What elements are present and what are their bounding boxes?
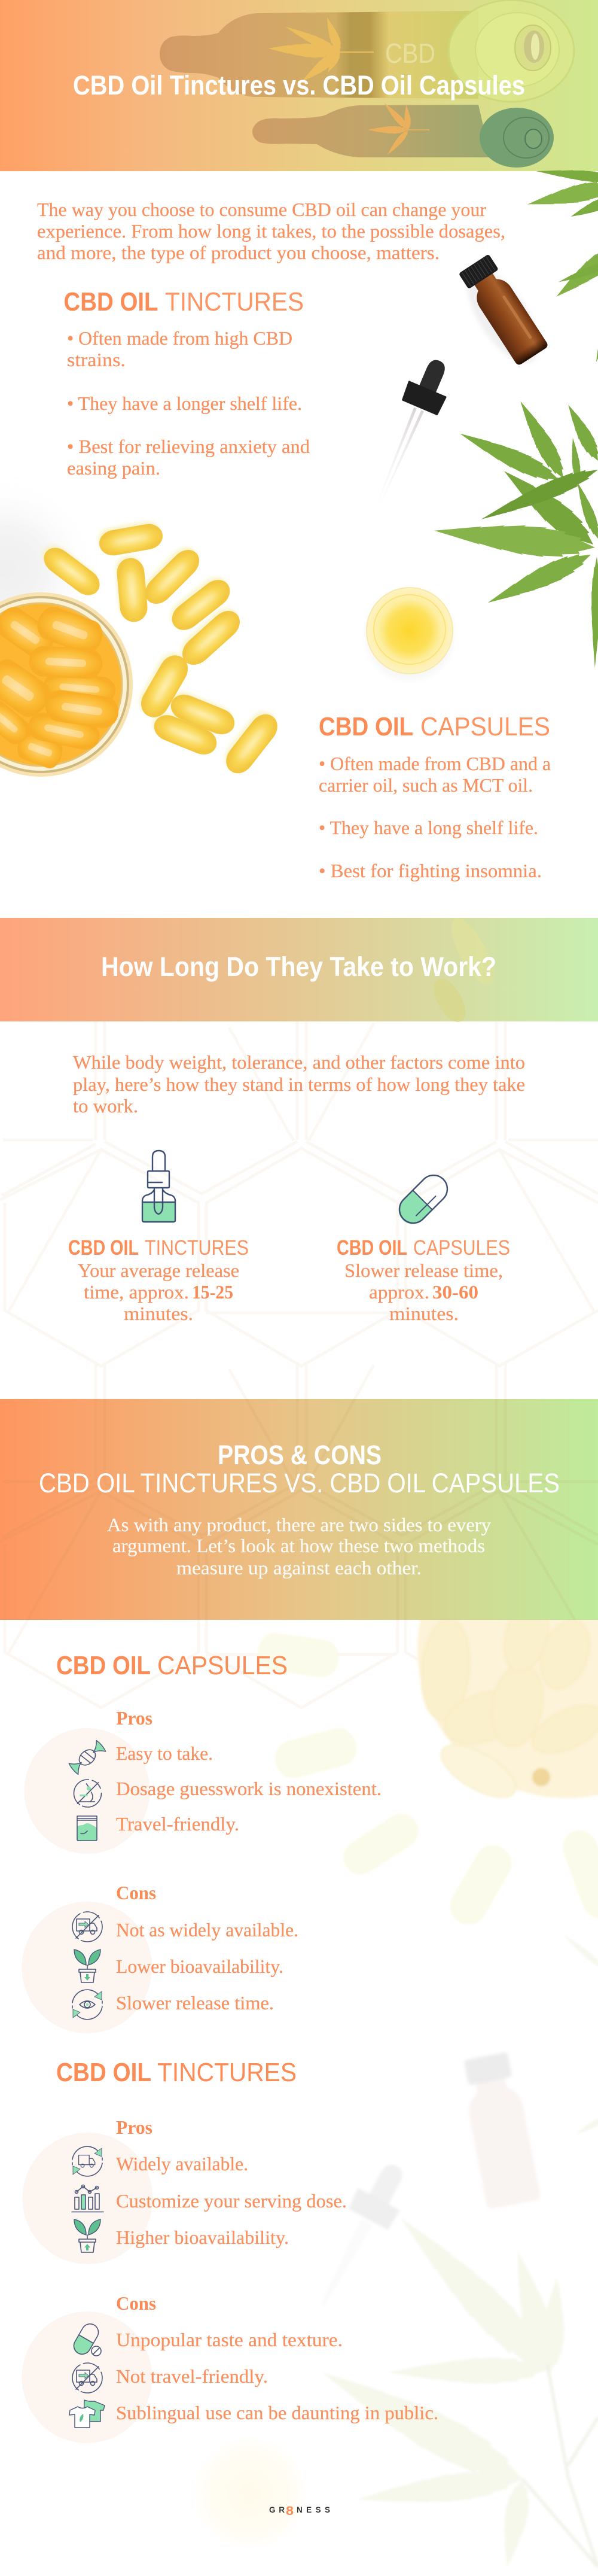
text: intro paragraph: and more, the type of product you choose, matters. <box>37 242 440 263</box>
label: Pros <box>116 2116 152 2138</box>
text: Sublingual use can be daunting in public. <box>116 2402 438 2423</box>
text: 15-25 <box>192 1281 233 1303</box>
label: Cons <box>116 2292 156 2314</box>
text: intro paragraph: The way you choose to consume CBD oil can change your <box>37 199 486 220</box>
icon: plant with up arrow <box>74 2219 100 2252</box>
background: pattern on band <box>0 1363 598 1708</box>
heading: CBD OIL <box>68 1236 139 1260</box>
text: Slower release time. <box>116 1992 274 2014</box>
text: Easy to take. <box>116 1742 213 1764</box>
text: Slower release time, <box>344 1260 503 1281</box>
image: faded loose capsules <box>257 1632 598 1930</box>
heading: tinctures: CBD OIL <box>56 2058 151 2087</box>
image: bottom bottle <box>252 101 554 168</box>
text: tinctures bullets: • Best for relieving anxiety and <box>67 436 310 457</box>
logo: GR8NESS <box>269 2504 330 2518</box>
background: hexagon pattern <box>0 1021 598 1708</box>
heading: How Long Do They Take to Work? <box>101 951 496 982</box>
text: capsules bullets <box>319 753 551 881</box>
text: capsules bullets: • Often made from CBD and a <box>319 753 551 774</box>
text: tinctures bullets: • Often made from high CBD <box>67 327 292 349</box>
image: top bottle <box>160 0 574 102</box>
heading: CAPSULES <box>413 1236 510 1260</box>
text: intro paragraph: experience. From how long it takes, to the possible dosages, <box>37 220 505 242</box>
label: Pros <box>116 1707 152 1729</box>
icon: eye cycle <box>72 1990 102 2020</box>
icon: candy <box>68 1740 106 1775</box>
image: capsules and jar <box>0 515 283 779</box>
icon: capsule with no sign <box>71 2321 102 2358</box>
title: CBD Oil Tinctures vs. CBD Oil Capsules <box>73 70 525 101</box>
group: capsules cons <box>22 1882 298 2033</box>
image: dropper <box>353 353 457 528</box>
panel: pros and cons band <box>0 1363 598 1708</box>
text: Dosage guesswork is nonexistent. <box>116 1778 382 1799</box>
icon: no delivery <box>72 2363 102 2393</box>
text: how long intro: While body weight, tolerance, and other factors come into <box>73 1051 525 1073</box>
icon: no delivery <box>72 1912 102 1942</box>
image: faded oil jar <box>193 2436 307 2551</box>
text: Higher bioavailability. <box>116 2227 289 2248</box>
text: Not travel-friendly. <box>116 2365 268 2387</box>
icon: shirts <box>69 2400 105 2428</box>
logo: GR8NESS: 8 <box>286 2504 294 2518</box>
icon: travel bag <box>77 1816 97 1841</box>
group: capsules pros <box>24 1707 382 1854</box>
heading <box>337 1236 510 1260</box>
image: faded leaves right edge <box>561 1932 598 2137</box>
band: how long heading <box>0 913 598 1027</box>
icon: plant with down arrow <box>74 1950 100 1982</box>
text: intro: As with any product, there are two sides to every <box>107 1514 491 1535</box>
text: 30-60 <box>432 1281 478 1303</box>
panel: header band <box>0 0 598 171</box>
column: tinctures release time <box>68 1151 249 1324</box>
text: Widely available. <box>116 2153 248 2174</box>
text: tinctures bullets: • They have a longer shelf life. <box>67 393 302 414</box>
heading: CBD oil capsules <box>319 712 550 741</box>
icon: bar chart <box>72 2185 103 2212</box>
group: tinctures pros <box>23 2116 347 2264</box>
text: tinctures bullets: easing pain. <box>67 457 160 479</box>
heading: CBD oil capsules: CAPSULES <box>420 712 550 741</box>
text: minutes. <box>389 1303 459 1324</box>
text <box>78 1260 239 1324</box>
text: intro: argument. Let’s look at how these two methods <box>112 1535 485 1556</box>
heading: CBD oil capsules: CBD OIL <box>319 712 413 741</box>
heading: CBD oil tinctures: CBD OIL <box>63 287 158 317</box>
text: intro <box>107 1514 491 1579</box>
logo: GR8NESS: NESS <box>297 2505 330 2514</box>
text: how long intro: to work. <box>73 1095 138 1117</box>
text: intro paragraph <box>37 199 505 263</box>
heading: tinctures: TINCTURES <box>157 2058 297 2087</box>
icon: dropper bottle <box>142 1151 175 1222</box>
heading: capsules <box>56 1651 288 1680</box>
heading: capsules: CAPSULES <box>157 1651 288 1680</box>
heading <box>68 1236 249 1260</box>
image: faded capsule bowl <box>417 1499 598 1808</box>
text: Customize your serving dose. <box>116 2190 347 2212</box>
heading: CBD OIL <box>337 1236 407 1260</box>
text: Lower bioavailability. <box>116 1955 283 1977</box>
text: capsules bullets: carrier oil, such as MCT oil. <box>319 774 533 796</box>
heading: pros and cons: PROS & CONS <box>218 1440 382 1470</box>
text: capsules bullets: • They have a long shelf life. <box>319 817 538 838</box>
text: CBD label on bottle: CBD <box>385 38 435 69</box>
panel: how long section <box>0 913 598 1708</box>
image: cannabis leaves top right <box>526 166 598 363</box>
image: small oil jar <box>365 588 454 681</box>
heading: CBD oil tinctures <box>63 287 304 317</box>
image: brown bottle <box>450 253 553 374</box>
text: how long intro: play, here’s how they stand in terms of how long they take <box>73 1073 525 1095</box>
text: how long intro <box>73 1051 525 1117</box>
heading: TINCTURES <box>145 1236 249 1260</box>
text: minutes. <box>124 1303 193 1324</box>
panel: intro and product overview <box>0 166 598 881</box>
heading: CBD oil tinctures: TINCTURES <box>165 287 304 317</box>
text: tinctures bullets: strains. <box>67 349 126 370</box>
text: tinctures bullets <box>67 327 310 479</box>
logo: GR8NESS: GR <box>269 2505 285 2514</box>
text: Unpopular taste and texture. <box>116 2329 343 2350</box>
heading: capsules: CBD OIL <box>56 1651 151 1680</box>
image: faded dropper <box>301 2155 417 2317</box>
text: Travel-friendly. <box>116 1813 239 1835</box>
label: Cons <box>116 1882 156 1903</box>
column: capsules release time <box>337 1170 510 1324</box>
icon: capsule <box>393 1170 453 1230</box>
icon: delivery cycle <box>72 2146 102 2176</box>
group: tinctures cons <box>22 2292 438 2443</box>
text <box>344 1260 503 1324</box>
panel: capsules and tinctures faded background <box>22 1499 598 2569</box>
text: capsules bullets: • Best for fighting insomnia. <box>319 860 542 881</box>
text: time, approx. <box>84 1281 189 1303</box>
icon: no microscope <box>74 1780 102 1807</box>
heading: tinctures <box>56 2058 297 2087</box>
text: approx. <box>369 1281 429 1303</box>
image: faded brown bottle <box>459 2051 541 2209</box>
image: cannabis leaves lower right <box>433 397 598 668</box>
image: faded cannabis leaves <box>313 2204 598 2569</box>
text: intro: measure up against each other. <box>176 1557 422 1579</box>
text: Your average release <box>78 1260 239 1281</box>
text: Not as widely available. <box>116 1919 298 1941</box>
